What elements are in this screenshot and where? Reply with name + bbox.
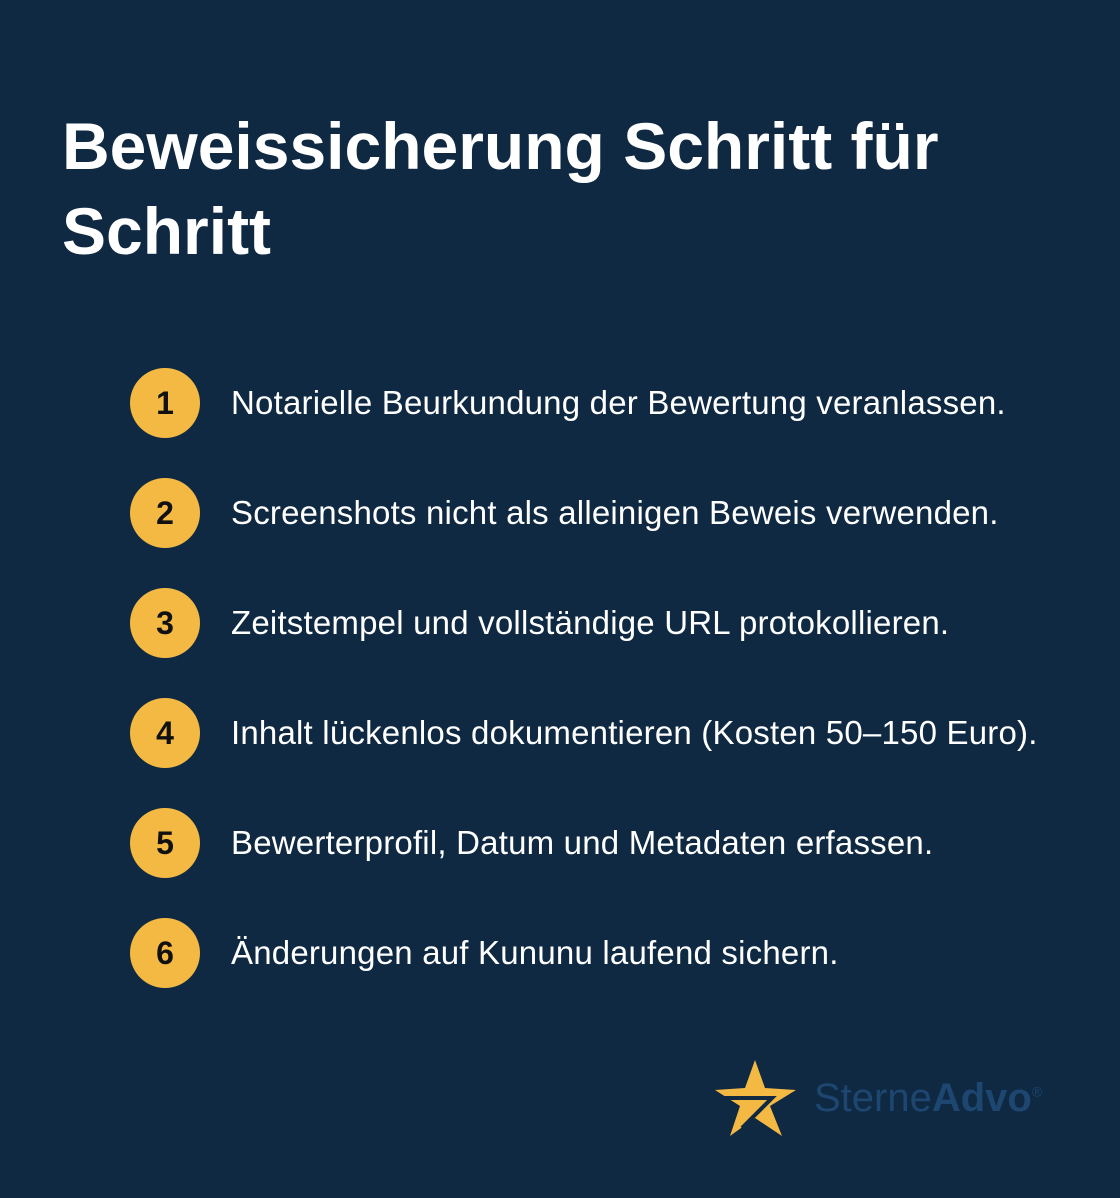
step 3: Zeitstempel und vollständige URL protokollieren. [231,604,949,641]
step 4: Inhalt lückenlos dokumentieren (Kosten 50–150 Euro). [231,714,1038,751]
step 6: Änderungen auf Kununu laufend sichern. [231,934,839,971]
step 6 [130,918,839,988]
step 6: 6 [156,935,174,971]
step 3 [130,588,949,658]
step 4 [130,698,1038,768]
step 3: 3 [156,605,174,641]
icon: star [715,1060,796,1136]
step 2 [130,478,999,548]
step 5: 5 [156,825,174,861]
logo [715,1060,1042,1136]
step 2: 2 [156,495,174,531]
title: Beweissicherung Schritt für [62,109,939,183]
step 5: Bewerterprofil, Datum und Metadaten erfassen. [231,824,933,861]
brand text: SterneAdvo® [814,1076,1042,1120]
step 5 [130,808,933,878]
step 2: Screenshots nicht als alleinigen Beweis verwenden. [231,494,999,531]
title: Schritt [62,194,271,268]
title [62,109,939,268]
step 1 [130,368,1006,438]
step 4: 4 [156,715,174,751]
step 1: 1 [156,385,174,421]
step 1: Notarielle Beurkundung der Bewertung veranlassen. [231,384,1006,421]
